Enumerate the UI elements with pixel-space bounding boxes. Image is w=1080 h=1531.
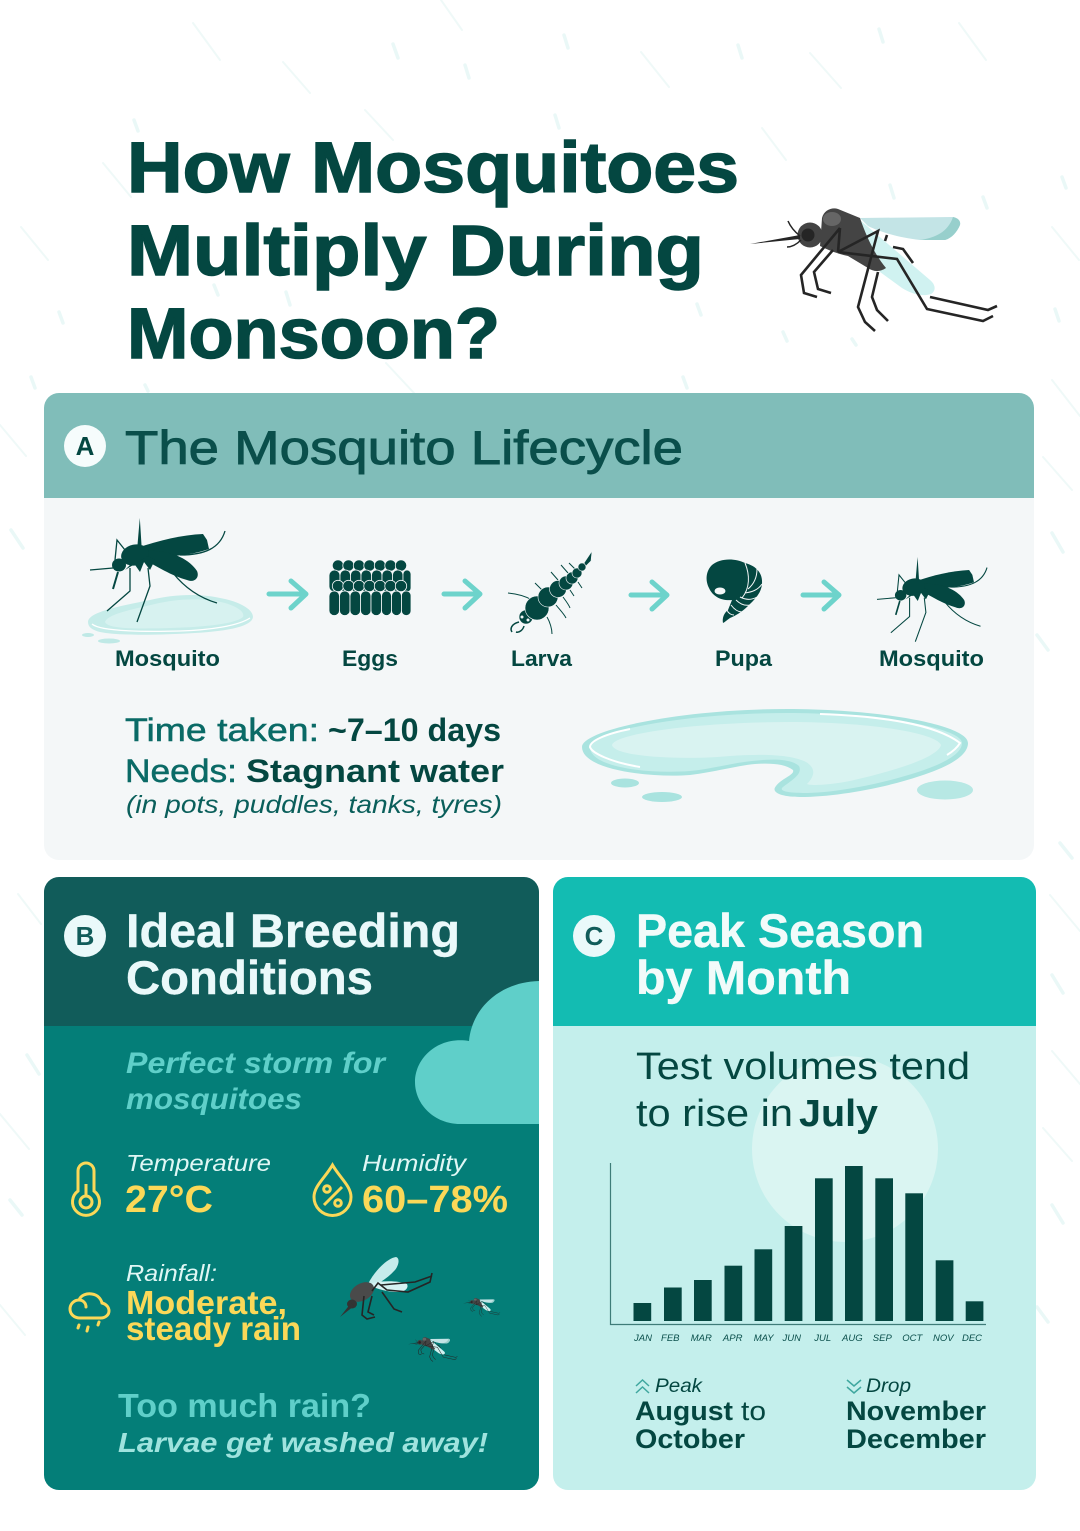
callout: too much rain: Too much rain? [118,1387,371,1424]
title: How Mosquitoes [127,129,739,208]
stat: peak: October [635,1424,746,1454]
bar chart: MAR [691,1333,712,1344]
panel C header [553,877,1036,1026]
bar chart: SEP [873,1333,892,1344]
icon: large mosquito illustration [750,208,997,331]
bar chart: DEC [962,1333,982,1344]
icon: adult mosquito [877,557,987,642]
arrow [269,581,306,608]
stat: drop: Drop [866,1376,911,1397]
icon: peak chevrons [636,1380,649,1393]
text: test volumes: July [799,1093,878,1135]
stat: rainfall [126,1260,301,1347]
decoration: sun circle [752,1056,938,1242]
stat: peak: Peak [655,1376,704,1397]
stat: drop [846,1376,987,1454]
text block: time and needs: Stagnant water [246,753,504,789]
text block: time and needs: Time taken: [125,712,319,748]
panel B header [44,877,539,1026]
title: Monsoon? [127,295,500,374]
bar chart [610,1163,986,1344]
title: Multiply During [127,212,704,291]
stat: drop: November [846,1396,987,1426]
icon: humidity drop [314,1165,351,1216]
stat: peak [635,1376,766,1454]
text: test volumes: to rise in [636,1093,793,1135]
stat: drop: December [846,1424,987,1454]
icon: rain cloud [70,1294,109,1331]
bar chart: JUN [781,1333,801,1344]
label: Pupa: Pupa [715,646,773,671]
callout: too much rain [118,1387,488,1458]
panel B header: Conditions [126,951,373,1004]
icon: thermometer [72,1163,100,1215]
panel C header: C [585,921,604,951]
bar chart: FEB [661,1333,680,1344]
bar chart: JUL [813,1333,831,1344]
label: Mosquito: Mosquito [879,646,984,671]
stat: peak: August [635,1396,733,1426]
stat: rainfall: Moderate, [126,1284,287,1321]
stat: humidity: Humidity [362,1150,468,1176]
panel A header: A [76,431,95,461]
text block: time and needs: ~7–10 days [328,712,501,748]
icon: eggs [329,560,411,616]
text: perfect storm [126,1047,387,1116]
panel C header: by Month [636,951,851,1004]
text: perfect storm: Perfect storm for [126,1047,387,1080]
panel A header: The Mosquito Lifecycle [125,421,683,474]
icon: larva [508,551,592,634]
bar chart: OCT [902,1333,924,1344]
label: Mosquito: Mosquito [115,646,220,671]
text block: time and needs: (in pots, puddles, tanks, tyres) [126,791,502,819]
bar chart: AUG [841,1333,863,1344]
icon: mosquito over puddle [82,518,253,644]
panel: C peak season by month [553,877,1036,1490]
panel A header [44,393,1034,498]
bar chart: MAY [754,1333,774,1344]
arrow [631,582,667,609]
label: Larva: Larva [511,646,573,671]
stat: temperature: 27°C [125,1179,213,1221]
stat: temperature: Temperature [126,1150,271,1176]
stat: rainfall: Rainfall: [126,1260,217,1286]
text: test volumes: Test volumes tend [636,1046,970,1088]
panel B header: B [76,921,94,951]
decoration: cloud [415,981,539,1124]
icon: drop chevrons [847,1380,861,1393]
arrow [803,582,839,609]
panel B header: Ideal Breeding [126,904,460,957]
text block: time and needs [125,712,504,819]
bar chart: NOV [933,1333,955,1344]
stat: humidity: 60–78% [362,1179,508,1221]
text block: time and needs: Needs: [125,753,237,789]
bar chart: APR [722,1333,743,1344]
panel: B ideal breeding conditions [44,877,539,1490]
illustration: flying mosquitoes [340,1257,500,1362]
label: Eggs: Eggs [342,646,398,671]
text: perfect storm: mosquitoes [126,1083,302,1116]
title [127,129,739,374]
stat: rainfall: steady rain [126,1310,301,1347]
stat: peak: to [741,1396,766,1426]
text: test volumes [636,1046,970,1135]
icon: pupa [707,559,762,623]
arrow [444,581,480,608]
panel: A mosquito lifecycle [44,393,1034,860]
stat: humidity [362,1150,508,1221]
callout: too much rain: Larvae get washed away! [118,1427,488,1458]
bar chart: JAN [633,1333,652,1344]
panel C header: Peak Season [636,904,924,957]
stat: temperature [125,1150,271,1221]
illustration: puddle [582,709,973,802]
